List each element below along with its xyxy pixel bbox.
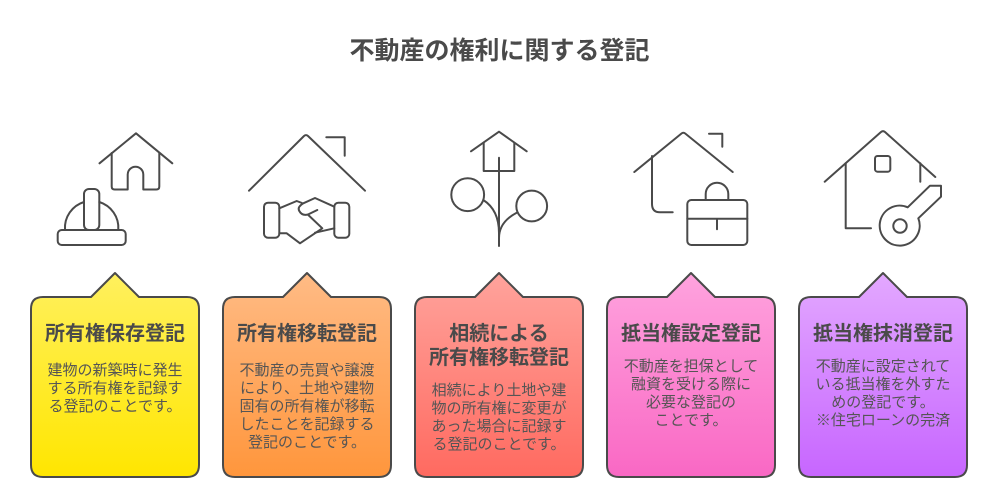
text: 所有権保存登記の説明: する所有権を記録す — [47, 380, 183, 397]
icon: house and key — [825, 131, 941, 246]
text: 所有権移転登記の説明: により、土地や建物 — [240, 380, 374, 397]
text: 所有権移転登記の説明: 固有の所有権が移転 — [239, 398, 375, 415]
text: 所有権移転登記の説明: 登記のことです。 — [248, 434, 366, 451]
icon: roof and handshake — [249, 135, 365, 243]
text: 抵当権抹消登記の説明: 不動産に設定されて — [816, 358, 950, 375]
text: 相続による所有権移転登記の説明 — [431, 382, 567, 453]
text: 所有権移転登記の説明: 不動産の売買や譲渡 — [239, 362, 375, 379]
text: 抵当権設定登記の説明: 必要な登記の — [646, 394, 736, 411]
panel: 相続による所有権移転登記 — [415, 273, 583, 477]
text: 所有権移転登記の説明 — [239, 362, 375, 451]
text: 抵当権抹消登記の説明 — [815, 358, 951, 429]
panel: 所有権保存登記 — [31, 273, 199, 477]
heading: 所有権保存登記: 所有権保存登記 — [45, 322, 185, 345]
panel: 抵当権設定登記 — [607, 273, 775, 477]
text: 抵当権抹消登記の説明: めの登記です。 — [831, 394, 935, 411]
heading: 相続による所有権移転登記: 相続による — [449, 322, 549, 345]
heading: 相続による所有権移転登記 — [429, 322, 569, 369]
text: 抵当権設定登記の説明: 不動産を担保として — [624, 358, 758, 375]
heading: 相続による所有権移転登記: 所有権移転登記 — [429, 346, 569, 369]
heading: 所有権移転登記: 所有権移転登記 — [237, 322, 377, 345]
icon: house and hard hat — [58, 133, 172, 245]
text: 抵当権抹消登記の説明: ※住宅ローンの完済 — [816, 412, 950, 429]
text: 相続による所有権移転登記の説明: あった場合に記録す — [431, 418, 567, 435]
text: 抵当権抹消登記の説明: いる抵当権を外すた — [815, 376, 951, 393]
text: 相続による所有権移転登記の説明: 物の所有権に変更が — [431, 400, 567, 417]
text: 抵当権設定登記の説明: 融資を受ける際に — [631, 376, 751, 393]
icon: house and briefcase — [634, 133, 747, 245]
text: 所有権保存登記の説明: 建物の新築時に発生 — [47, 361, 183, 379]
heading: 抵当権設定登記: 抵当権設定登記 — [621, 322, 761, 345]
text: 相続による所有権移転登記の説明: る登記のことです。 — [432, 436, 566, 453]
title: 不動産の権利に関する登記 — [349, 37, 650, 65]
text: 所有権保存登記の説明 — [47, 361, 183, 415]
text: 相続による所有権移転登記の説明: 相続により土地や建 — [432, 382, 566, 399]
text: 抵当権設定登記の説明 — [624, 358, 758, 429]
icon: house on branching plant — [451, 132, 547, 246]
text: 所有権移転登記の説明: したことを記録する — [239, 416, 375, 433]
panel: 所有権移転登記 — [223, 273, 391, 477]
text: 抵当権設定登記の説明: ことです。 — [654, 412, 728, 429]
panel: 抵当権抹消登記 — [799, 273, 967, 477]
heading: 抵当権抹消登記: 抵当権抹消登記 — [813, 322, 953, 345]
text: 所有権保存登記の説明: る登記のことです。 — [48, 398, 182, 415]
